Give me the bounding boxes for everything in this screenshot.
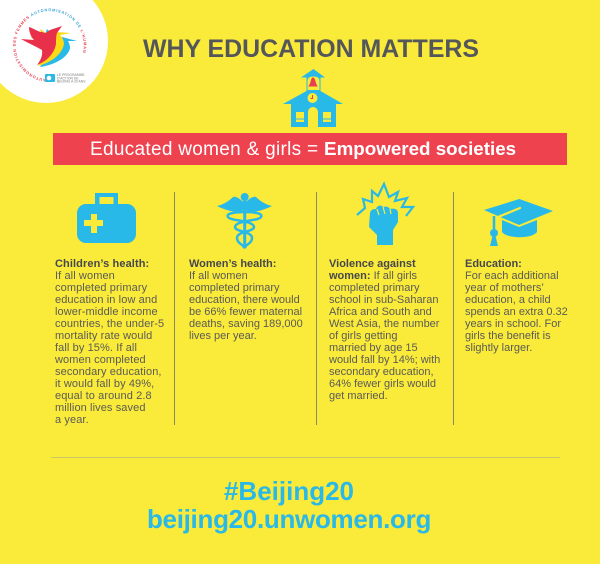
text: education: spends an extra 0.32 [465, 306, 568, 318]
text: violence against women: completed primary [329, 282, 419, 294]
text: children's health: mortality rate would [55, 330, 152, 342]
text: education: year of mothers’ [465, 282, 544, 294]
title: WHY EDUCATION MATTERS [143, 35, 479, 63]
text: violence against women: would fall by 14%; with [329, 354, 440, 366]
banner: Educated women & girls = Empowered societies [90, 138, 516, 160]
icon: graduation cap [484, 199, 553, 246]
text: children's health [55, 258, 164, 426]
logo caption: D'ACTION DE [57, 76, 79, 80]
text: education [465, 258, 568, 354]
text: education: slightly larger. [465, 342, 532, 354]
text: education: education, a child [465, 294, 551, 306]
text: violence against women: school in sub-Saharan [329, 294, 438, 306]
text: violence against women [329, 258, 440, 402]
icon: caduceus [217, 193, 272, 249]
text: children's health: secondary education, [55, 366, 162, 378]
text: children's health: lower-middle income [55, 306, 158, 318]
logo caption: BEIJING A 20 ANS [57, 80, 86, 84]
text: women's health: lives per year. [189, 330, 257, 342]
logo caption: LE PROGRAMME [57, 73, 85, 77]
divider [174, 192, 175, 425]
text: children's health: million lives saved [55, 402, 146, 414]
text: education: girls the benefit is [465, 330, 551, 342]
hashtag: #Beijing20 [224, 476, 354, 506]
text: children's health: fall by 15%. If all [55, 342, 137, 354]
website: beijing20.unwomen.org [147, 504, 431, 534]
text: women's health: deaths, saving 189,000 [189, 318, 303, 330]
text: education: Education: [465, 258, 522, 270]
icon: schoolhouse [283, 69, 343, 127]
text: children's health: equal to around 2.8 [55, 390, 152, 402]
banner [53, 133, 567, 165]
text: women's health: Women’s health: [189, 258, 276, 270]
divider [316, 192, 317, 425]
text: violence against women: women: If all girls [329, 270, 417, 282]
divider [453, 192, 454, 425]
text: women's health: be 66% fewer maternal [189, 306, 302, 318]
text: children's health: a year. [55, 414, 89, 426]
text: violence against women: 64% fewer girls would [329, 378, 436, 390]
text: violence against women: Africa and South and [329, 306, 432, 318]
icon: raised fist [356, 181, 416, 245]
text: education: For each additional [465, 270, 559, 282]
text: violence against women: Violence against [329, 258, 416, 270]
text: children's health: women completed [55, 354, 146, 366]
icon: UN Women mark [45, 74, 55, 82]
text: children's health: countries, the under-5 [55, 318, 164, 330]
text: women's health: If all women [189, 270, 248, 282]
text: children's health: Children’s health: [55, 258, 149, 270]
text: women's health: education, there would [189, 294, 300, 306]
text: children's health: education in low and [55, 294, 157, 306]
text: violence against women: married by age 15 [329, 342, 418, 354]
text: children's health: If all women [55, 270, 115, 282]
text: violence against women: get married. [329, 390, 388, 402]
icon: dove [21, 26, 77, 67]
text: education: years in school. For [465, 318, 561, 330]
logo badge [0, 0, 108, 103]
text: women's health [189, 258, 303, 342]
text: children's health: it would fall by 49%, [55, 378, 154, 390]
text: violence against women: West Asia, the number [329, 318, 439, 330]
icon: first aid kit [77, 193, 136, 243]
text: violence against women: secondary education, [329, 366, 434, 378]
text: children's health: completed primary [55, 282, 147, 294]
text: violence against women: of girls getting [329, 330, 397, 342]
text: women's health: completed primary [189, 282, 279, 294]
